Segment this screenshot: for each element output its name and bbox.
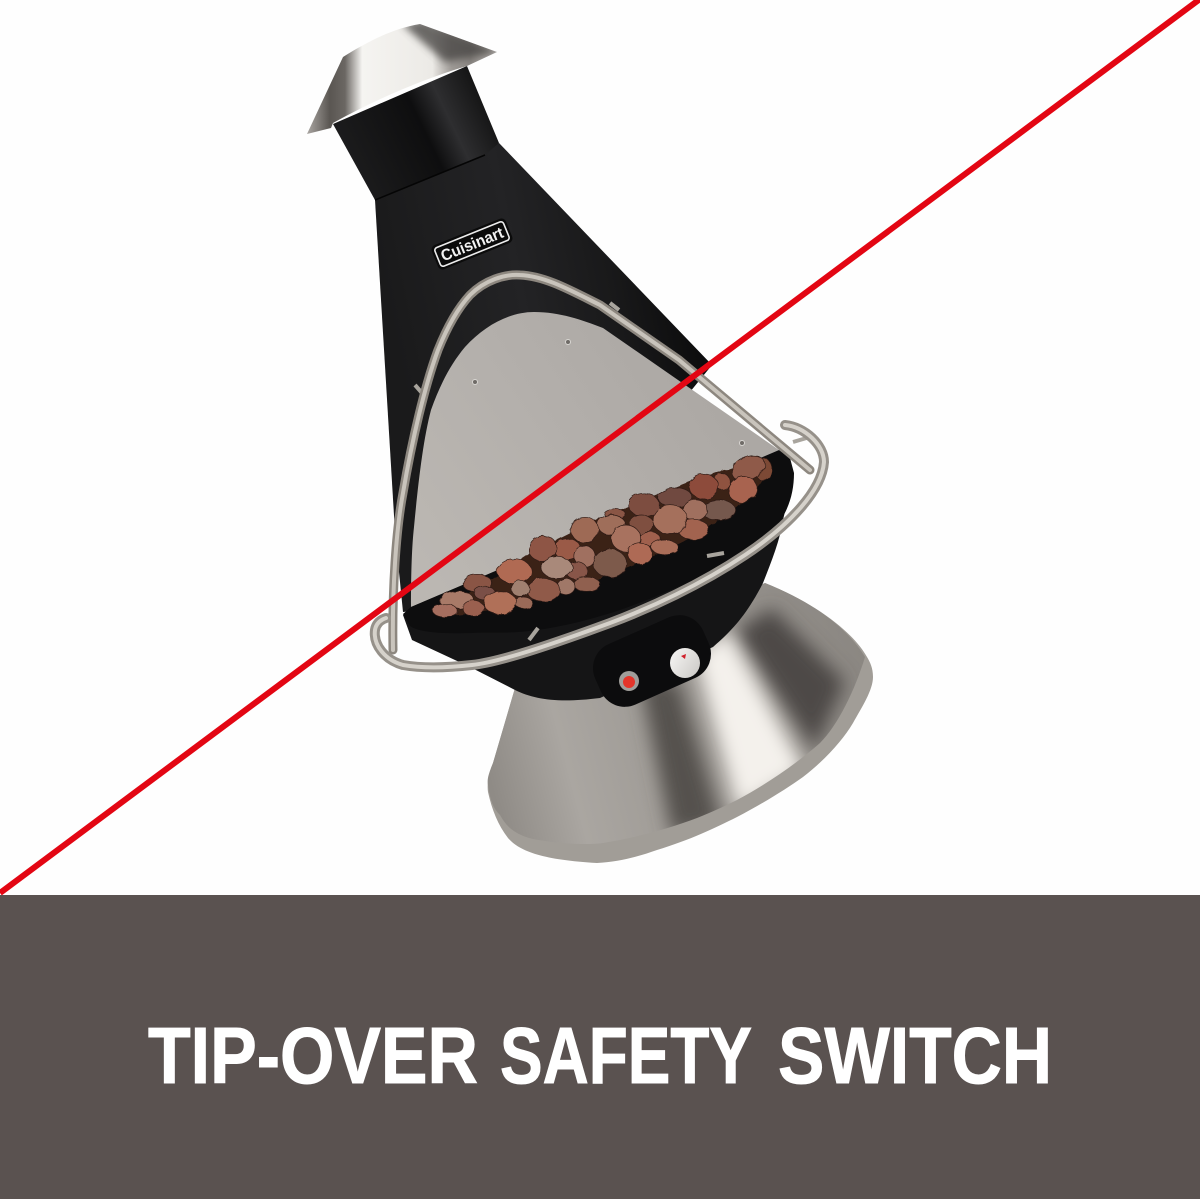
banner heading xyxy=(148,1011,1052,1100)
chimney and cone body xyxy=(333,66,712,612)
Cuisinart logo badge xyxy=(430,217,514,271)
handle mounting pegs xyxy=(415,303,810,640)
bowl lower body xyxy=(403,473,794,700)
banner heading: TIP-OVER xyxy=(148,1011,478,1100)
stainless door panel xyxy=(411,312,779,607)
control box xyxy=(585,607,719,715)
bottom banner xyxy=(0,895,1200,1199)
fire pit product illustration xyxy=(307,20,873,863)
bowl rim xyxy=(403,450,794,633)
control knob xyxy=(670,648,700,678)
Cuisinart logo badge: Cuisinart xyxy=(439,224,507,265)
banner heading: SAFETY xyxy=(500,1011,752,1100)
stainless conical base xyxy=(488,583,873,863)
red diagonal line xyxy=(0,0,1200,893)
chimney cap xyxy=(307,20,500,134)
lava rocks xyxy=(432,451,772,617)
panel rivets xyxy=(472,340,744,446)
stainless top ring handle xyxy=(393,275,810,650)
red ignition button xyxy=(619,671,639,691)
banner heading: SWITCH xyxy=(778,1011,1052,1100)
stainless lower ring handle xyxy=(375,425,824,667)
